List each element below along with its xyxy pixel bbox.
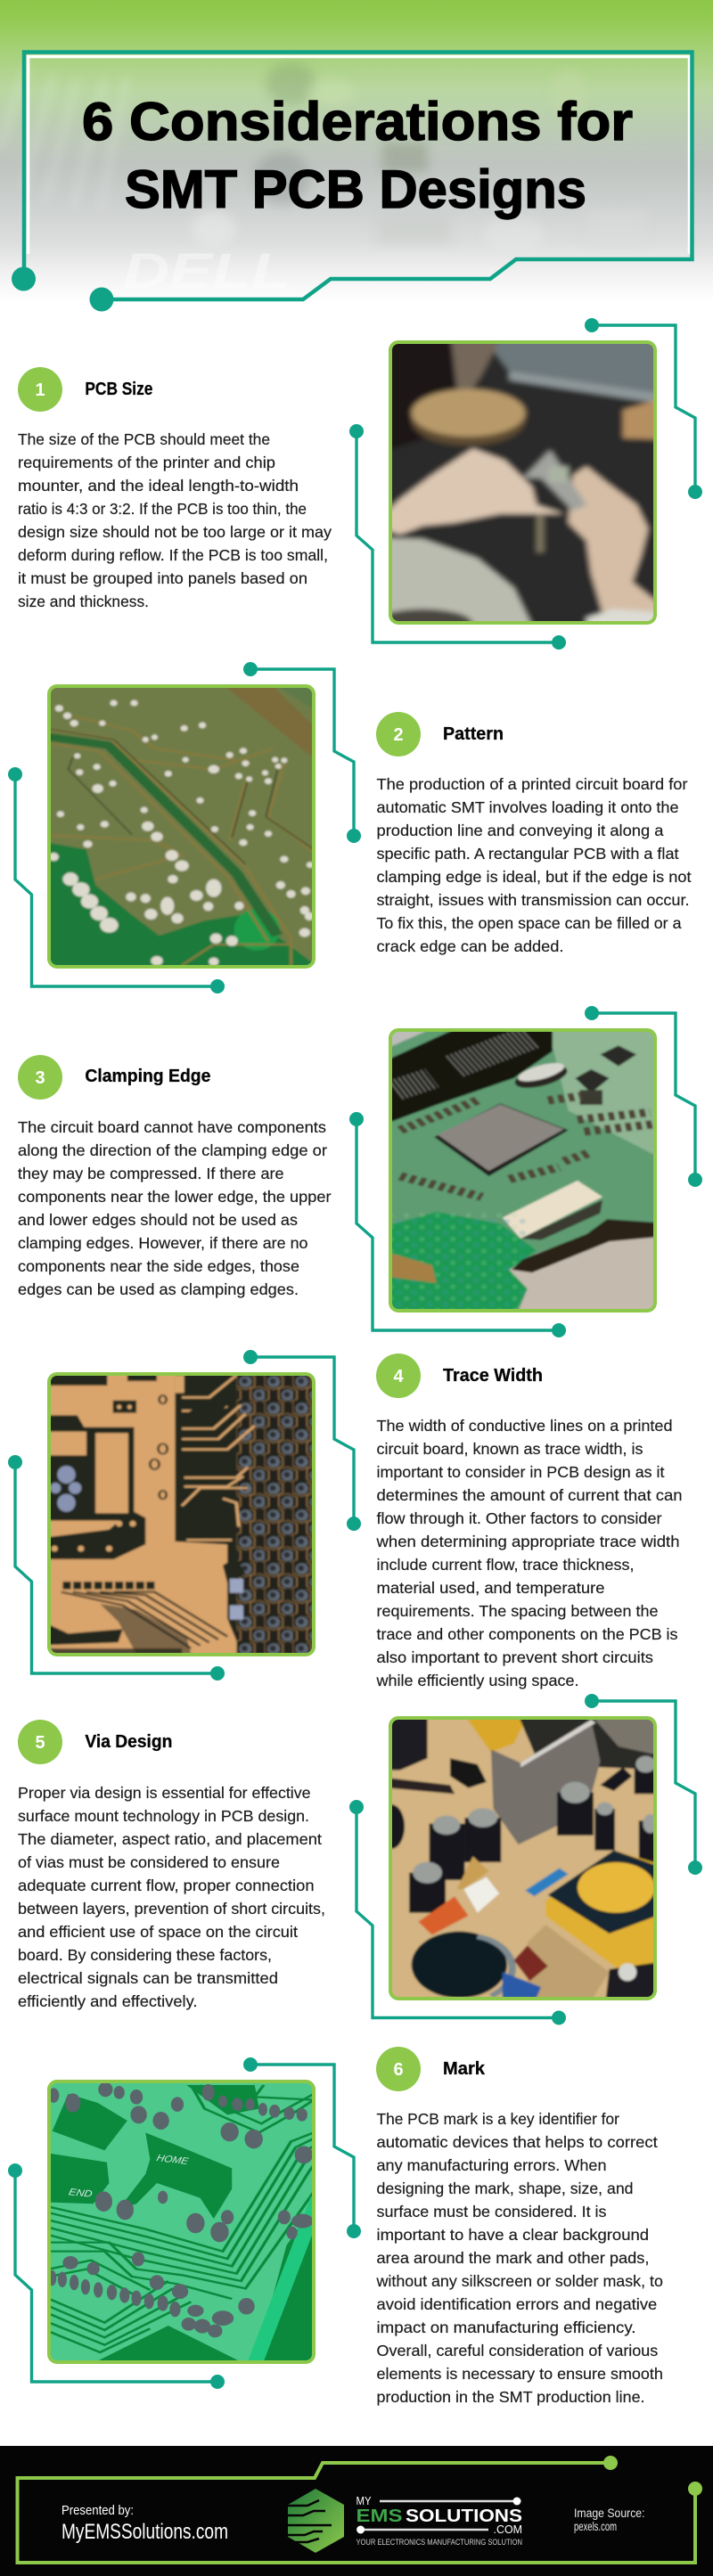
panel: 5 Via Design [18, 1694, 702, 2024]
text block: PCB Size: mounter, and the ideal length-to-width [18, 477, 299, 495]
number badge 6: 6 [393, 2060, 404, 2080]
circuit connectors [8, 662, 361, 994]
number badge 5: 5 [35, 1733, 45, 1753]
logo wordmark: .COM [494, 2523, 522, 2536]
photo: capacitors and transformer [389, 1716, 657, 2000]
text block: Pattern: To fix this, the open space can be filled or a [376, 914, 682, 932]
panel: 4 Trace Width [8, 1350, 683, 1689]
text block: Via Design: The diameter, aspect ratio, and placement [18, 1830, 322, 1848]
text block: Via Design: of vias must be considered to ensure [18, 1853, 280, 1871]
text block: Mark: area around the mark and other pads, [376, 2249, 649, 2267]
image source: pexels.com [574, 2520, 617, 2533]
text block: Trace Width: important to consider in PCB design as it [376, 1463, 665, 1481]
text block: Mark: any manufacturing errors. When [376, 2156, 606, 2174]
text block: Pattern: The production of a printed circuit board for [376, 775, 688, 793]
circuit connectors [349, 1006, 702, 1337]
text block: Trace Width: trace and other components on the PCB is [376, 1625, 678, 1643]
logo [288, 2489, 522, 2553]
text block: Via Design: between layers, prevention of short circuits, [18, 1900, 325, 1918]
text block: PCB Size: ratio is 4:3 or 3:2. If the PCB is too thin, the [18, 500, 307, 518]
text block: Trace Width: requirements. The spacing between the [376, 1602, 658, 1620]
photo: tan and black board traces [47, 1372, 316, 1656]
text block: Mark: automatic devices that helps to correct [376, 2133, 658, 2151]
heading: Mark: Mark [443, 2059, 486, 2079]
logo wordmark: SOLUTIONS [406, 2506, 522, 2526]
photo frame [49, 1374, 314, 1655]
number badge 2 [376, 712, 421, 756]
footer circuit line [18, 2456, 702, 2563]
number badge 4: 4 [393, 1367, 404, 1386]
image source [574, 2506, 645, 2533]
text block: Trace Width: determines the amount of current that can [376, 1486, 683, 1504]
text block: Clamping Edge: The circuit board cannot have components [18, 1118, 326, 1136]
text block: Via Design [18, 1784, 325, 2010]
text block: Pattern: straight, issues with transmission can occur. [376, 891, 690, 909]
photo: bright green board HOME END [45, 2079, 318, 2367]
heading: Via Design: Via Design [85, 1732, 172, 1752]
text block: Trace Width: material used, and temperature [376, 1579, 604, 1597]
text block: Pattern: automatic SMT involves loading it onto the [376, 798, 679, 816]
number badge 3: 3 [35, 1068, 45, 1088]
header background [0, 0, 713, 303]
panel: 2 Pattern [8, 662, 692, 994]
text block: PCB Size: requirements of the printer and chip [18, 454, 275, 471]
logo wordmark: YOUR ELECTRONICS MANUFACTURING SOLUTION [356, 2538, 522, 2547]
heading: Trace Width: Trace Width [443, 1366, 543, 1386]
text block: Pattern: production line and conveying it along a [376, 822, 664, 839]
heading: Clamping Edge: Clamping Edge [85, 1067, 210, 1086]
logo hexagon icon [288, 2489, 344, 2553]
photo: bright green board HOME END: HOME [155, 2153, 190, 2166]
text block: Pattern: crack edge can be added. [376, 937, 563, 955]
text block: Trace Width: include current flow, trace thickness, [376, 1556, 635, 1574]
number badge 4 [376, 1353, 421, 1398]
circuit connectors [349, 318, 702, 650]
number badge 1 [18, 367, 62, 412]
text block: Via Design: board. By considering these factors, [18, 1946, 272, 1964]
text block: Pattern [376, 775, 692, 955]
text block: Via Design: and efficient use of space on the circuit [18, 1923, 298, 1941]
presenter [61, 2504, 228, 2544]
text block: Clamping Edge: components near the lower edge, the upper [18, 1188, 332, 1206]
heading: Pattern: Pattern [443, 724, 504, 744]
circuit connectors [8, 2057, 361, 2389]
panel: 3 Clamping Edge [18, 1006, 702, 1337]
presenter: MyEMSSolutions.com [61, 2520, 228, 2544]
text block: Pattern: specific path. A rectangular PCB with a flat [376, 845, 679, 863]
heading: PCB Size: PCB Size [85, 380, 152, 399]
footer panel [0, 2446, 713, 2576]
text block: Via Design: adequate current flow, proper connection [18, 1877, 315, 1894]
circuit connectors [8, 1350, 361, 1681]
text block: Trace Width: The width of conductive lines on a printed [376, 1417, 672, 1435]
text block: Mark: avoid identification errors and negative [376, 2295, 657, 2313]
text block: Mark: elements is necessary to ensure smooth [376, 2365, 663, 2383]
text block: Clamping Edge [18, 1118, 332, 1298]
circuit connectors [349, 1694, 702, 2024]
photo: green board with chip [389, 1028, 657, 1313]
text block: Via Design: surface mount technology in PCB design. [18, 1807, 309, 1825]
text block: Trace Width: flow through it. Other factors to consider [376, 1509, 662, 1527]
text block: Mark: designing the mark, shape, size, and [376, 2179, 633, 2197]
number badge 5 [18, 1720, 62, 1764]
text block: Clamping Edge: clamping edges. However, if there are no [18, 1234, 308, 1252]
text block: Trace Width [375, 1417, 683, 1689]
text block: PCB Size [18, 430, 332, 610]
text block: PCB Size: design size should not be too large or it may [18, 523, 332, 541]
text block: Mark: important to have a clear background [376, 2226, 649, 2244]
text block: Mark: The PCB mark is a key identifier for [376, 2110, 619, 2128]
panel: 1 PCB Size [18, 318, 702, 650]
logo wordmark: MY [356, 2495, 372, 2507]
presenter: Presented by: [61, 2504, 134, 2518]
photo frame [390, 1718, 655, 1999]
photo frame [390, 1030, 655, 1311]
text block: Trace Width: circuit board, known as trace width, is [376, 1440, 643, 1458]
text block: Mark: without any silkscreen or solder mask, to [375, 2272, 663, 2290]
image source: Image Source: [574, 2506, 645, 2520]
title: SMT PCB Designs [125, 159, 586, 219]
faded board logo: DELL [123, 242, 291, 298]
header frame [12, 52, 692, 312]
text block: Pattern: clamping edge is ideal, but if the edge is not [376, 868, 692, 886]
text block: Clamping Edge: they may be compressed. If there are [18, 1165, 283, 1182]
text block: Clamping Edge: and lower edges should not be used as [18, 1211, 298, 1229]
text block: Via Design: efficiently and effectively. [18, 1992, 198, 2010]
text block: Mark: surface must be considered. It is [376, 2203, 607, 2220]
text block: Mark: production in the SMT production line. [376, 2388, 645, 2406]
text block: Via Design: Proper via design is essential for effective [18, 1784, 311, 1802]
text block: Clamping Edge: edges can be used as clamping edges. [18, 1280, 299, 1298]
text block: PCB Size: deform during reflow. If the PCB is too small, [18, 546, 328, 564]
text block: Mark: impact on manufacturing efficiency. [376, 2318, 636, 2336]
photo frame [390, 342, 655, 623]
photo frame [49, 686, 314, 967]
logo wordmark [356, 2495, 522, 2547]
title: 6 Considerations for [82, 92, 633, 151]
text block: PCB Size: size and thickness. [18, 593, 149, 610]
text block: PCB Size: The size of the PCB should meet the [18, 430, 270, 448]
photo frame [49, 2081, 314, 2362]
number badge 3 [18, 1055, 62, 1100]
number badge 1: 1 [35, 380, 45, 400]
number badge 6 [376, 2047, 421, 2091]
text block: Trace Width: when determining appropriate trace width [375, 1533, 679, 1550]
title [82, 92, 633, 219]
text block: PCB Size: it must be grouped into panels based on [18, 569, 307, 587]
number badge 2: 2 [393, 725, 404, 745]
text block: Clamping Edge: components near the side edges, those [18, 1257, 299, 1275]
photo: olive circuit board [47, 684, 316, 969]
logo wordmark: EMS [356, 2506, 403, 2526]
text block: Mark: Overall, careful consideration of various [376, 2342, 659, 2359]
photo: bright green board HOME END: END [68, 2187, 94, 2199]
text block: Trace Width: while efficiently using space. [375, 1672, 579, 1689]
text block: Trace Width: also important to prevent short circuits [376, 1648, 653, 1666]
text block: Via Design: electrical signals can be transmitted [18, 1969, 278, 1987]
text block: Clamping Edge: along the direction of the clamping edge or [18, 1141, 327, 1159]
text block: Mark [375, 2110, 663, 2406]
panel: 6 Mark [8, 2047, 663, 2406]
photo: hands with calipers [389, 340, 657, 625]
